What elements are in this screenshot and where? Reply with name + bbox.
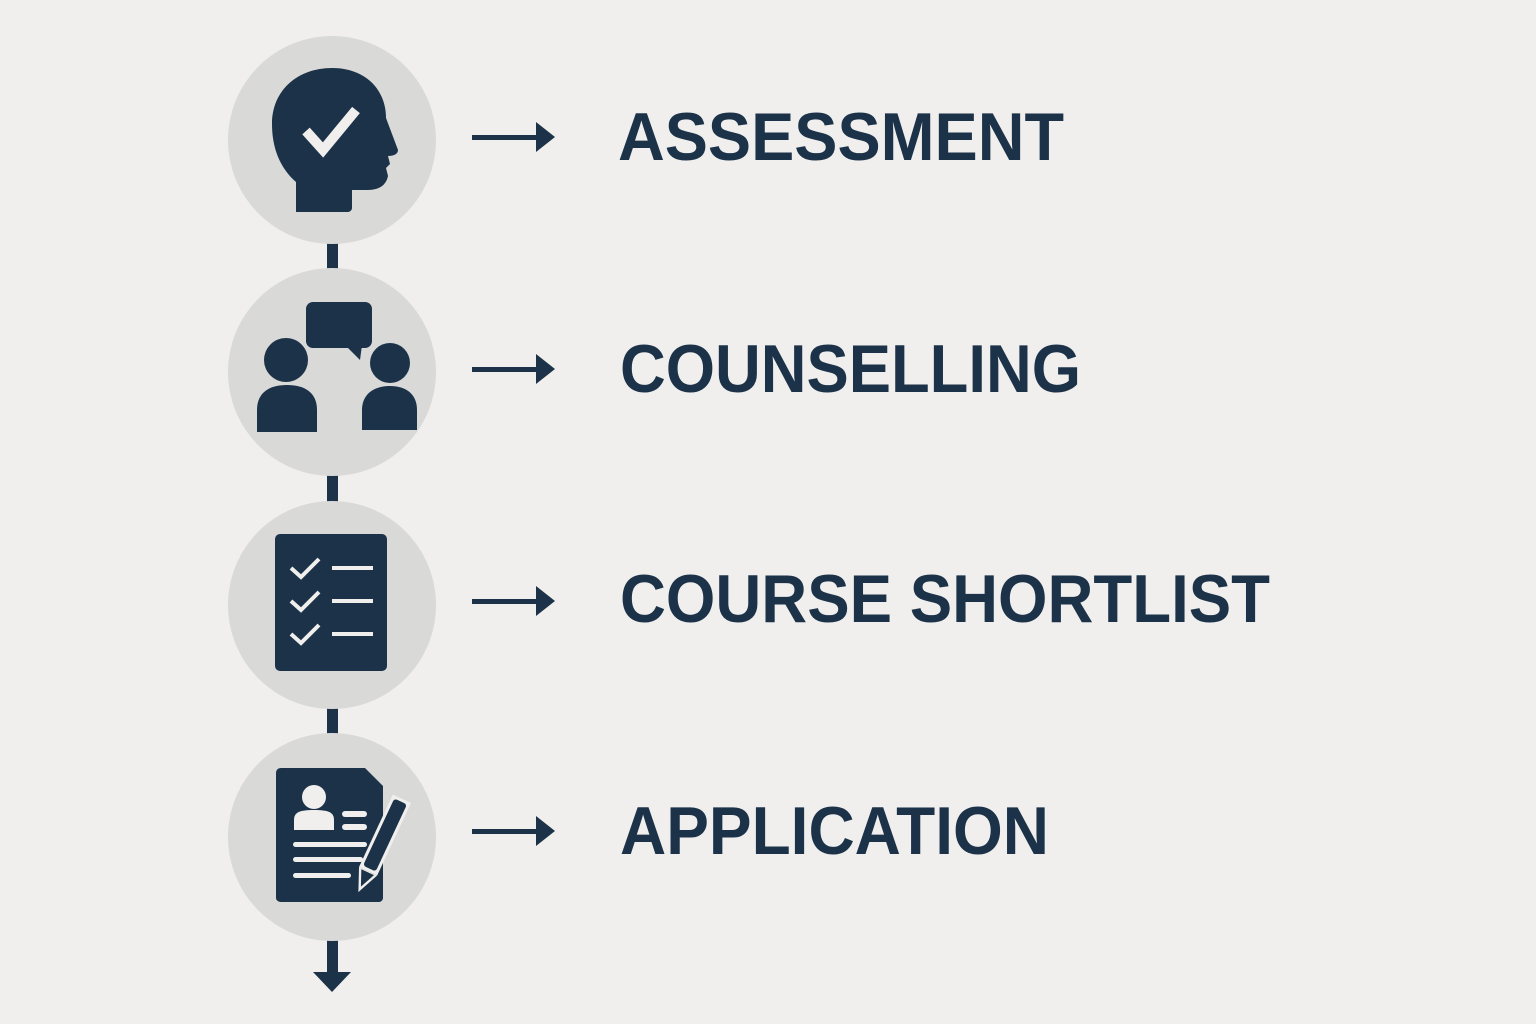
arrow [472,354,555,384]
icon: two people with speech bubble [257,302,417,432]
step 2: counselling [228,268,1081,476]
arrow [472,816,555,846]
arrow [472,122,555,152]
icon: checklist [275,534,387,671]
label: COUNSELLING [620,331,1081,407]
icon: resume with pen [276,768,411,902]
connector lines [327,240,338,737]
label: ASSESSMENT [618,99,1064,175]
arrow [472,586,555,616]
icon: head with check [272,68,398,212]
step 1: assessment [228,36,1064,244]
label: COURSE SHORTLIST [620,561,1270,637]
label: APPLICATION [620,793,1049,869]
down arrow [313,938,351,992]
step 3: course shortlist [228,501,1270,709]
step 4: application [228,733,1049,941]
